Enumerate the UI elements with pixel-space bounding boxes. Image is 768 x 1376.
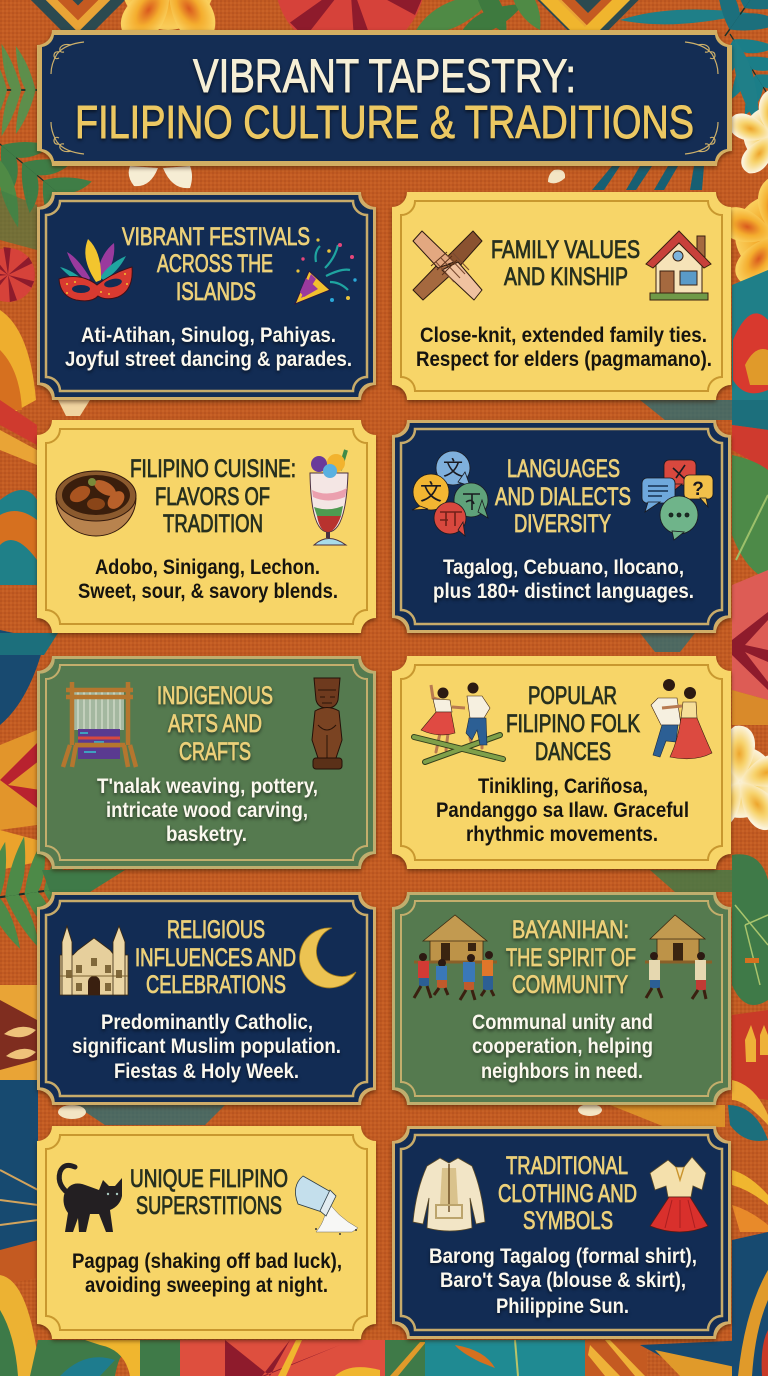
background: right lower tribal <box>732 1232 768 1376</box>
body text: basketry. <box>166 823 247 846</box>
body text <box>416 324 712 371</box>
heading: FILIPINO CUISINE: <box>130 455 296 483</box>
body text: Predominantly Catholic, <box>101 1011 313 1034</box>
heading: LANGUAGES <box>507 455 620 483</box>
icon: halo-halo parfait <box>310 450 348 545</box>
icon: house <box>646 231 711 300</box>
heading: DANCES <box>535 738 611 766</box>
body text <box>433 556 694 603</box>
panel: traditional clothing <box>392 1126 731 1339</box>
background: left blue leaf <box>0 1080 38 1285</box>
heading: SUPERSTITIONS <box>136 1192 282 1220</box>
body text: Joyful street dancing & parades. <box>65 348 352 371</box>
body text: T'nalak weaving, pottery, <box>97 775 318 798</box>
body text: Tinikling, Cariñosa, <box>478 775 648 798</box>
body text: Barong Tagalog (formal shirt), <box>429 1245 697 1268</box>
icon: baro't saya dress <box>650 1157 708 1232</box>
body text: Communal unity and <box>472 1011 653 1034</box>
heading <box>59 223 357 371</box>
heading <box>506 916 636 999</box>
body text: Respect for elders (pagmamano). <box>416 348 712 371</box>
panel: religious influences <box>37 892 376 1105</box>
background: teal fronds under title <box>592 166 704 190</box>
background: white petals under title <box>129 166 565 188</box>
body text: intricate wood carving, <box>106 799 308 822</box>
icon: wooden statue <box>312 678 342 769</box>
icon: adobo bowl <box>56 471 136 536</box>
icon: barong shirt <box>413 1158 485 1231</box>
background: bottom left leaves <box>0 1275 185 1376</box>
heading: BAYANIHAN: <box>512 916 629 944</box>
body text: avoiding sweeping at night. <box>85 1274 328 1297</box>
body text <box>429 1245 697 1318</box>
body text: plus 180+ distinct languages. <box>433 580 694 603</box>
body text: rhythmic movements. <box>466 823 658 846</box>
background: left red flower <box>0 730 40 870</box>
background: right parrot colors <box>732 270 768 420</box>
heading <box>506 682 640 766</box>
heading <box>495 455 631 538</box>
heading <box>130 1165 288 1220</box>
icon: speech bubbles right: ? <box>692 479 704 500</box>
body text: Tagalog, Cebuano, Ilocano, <box>443 556 684 579</box>
icon: tinikling dancers <box>414 682 503 762</box>
icon: couple dancing <box>651 679 712 759</box>
body text: Philippine Sun. <box>496 1295 629 1318</box>
heading: FAMILY VALUES <box>491 236 640 264</box>
title panel <box>37 30 732 166</box>
heading <box>157 682 273 766</box>
heading: AND DIALECTS <box>495 483 631 511</box>
body text <box>78 556 338 603</box>
body text: Pagpag (shaking off bad luck), <box>72 1250 342 1273</box>
heading <box>498 1152 637 1235</box>
heading: CLOTHING AND <box>498 1180 637 1208</box>
heading: DIVERSITY <box>514 510 611 538</box>
heading: CRAFTS <box>179 738 251 766</box>
heading: RELIGIOUS <box>167 916 265 944</box>
panel: folk dances <box>392 656 731 869</box>
background: top right teal leaves <box>620 0 768 154</box>
icon: speech bubbles left <box>412 451 488 536</box>
body text: significant Muslim population. <box>72 1035 341 1058</box>
heading: INFLUENCES AND <box>135 944 296 972</box>
heading: TRADITION <box>163 510 263 538</box>
body text: Sweet, sour, & savory blends. <box>78 580 338 603</box>
background: left green leaf <box>0 828 99 956</box>
heading: ISLANDS <box>176 278 256 306</box>
body text: Adobo, Sinigang, Lechon. <box>95 556 320 579</box>
icon: hut carried by people <box>414 915 497 1000</box>
heading: AND KINSHIP <box>504 263 628 291</box>
body text <box>65 324 352 371</box>
icon: joined hands <box>413 231 482 300</box>
background: left stripes and teal <box>0 400 37 585</box>
background: right plumeria <box>715 90 768 292</box>
panel: indigenous arts <box>37 656 376 869</box>
heading: FLAVORS OF <box>155 483 270 511</box>
heading <box>135 916 296 999</box>
icon: speech bubbles left: 文 <box>420 475 442 507</box>
panel: vibrant festivals <box>37 192 376 400</box>
panel: superstitions <box>37 1126 376 1339</box>
icon: party popper <box>295 238 357 304</box>
heading <box>130 455 296 538</box>
heading: FILIPINO FOLK <box>506 710 640 738</box>
body text: cooperation, helping <box>472 1035 653 1058</box>
panel: bayanihan <box>392 892 731 1105</box>
heading: UNIQUE FILIPINO <box>130 1165 288 1193</box>
body text: Ati-Atihan, Sinulog, Pahiyas. <box>81 324 336 347</box>
corner ornaments <box>51 42 718 154</box>
background: top tribal diamonds <box>0 0 669 51</box>
background: gap accents row gaps <box>0 400 732 1127</box>
heading: VIBRANT FESTIVALS <box>122 223 310 251</box>
body text <box>436 775 689 846</box>
body text <box>72 1250 342 1297</box>
background: left mid red flower and yellow leaves <box>0 190 37 420</box>
panel: filipino cuisine <box>37 420 376 633</box>
heading: THE SPIRIT OF <box>506 944 636 972</box>
heading: POPULAR <box>528 682 617 710</box>
background: top hibiscus <box>275 0 425 55</box>
background: left blue leaf band <box>0 630 45 725</box>
body text: Close-knit, extended family ties. <box>420 324 707 347</box>
background: bottom teal and tribal <box>385 1340 750 1376</box>
background: right green leaf <box>732 400 768 580</box>
icon: weaving loom <box>63 682 136 767</box>
panel: family values <box>392 192 731 400</box>
body text: Fiestas & Holy Week. <box>114 1060 299 1083</box>
title text: VIBRANT TAPESTRY: <box>193 49 576 102</box>
background: top yellow flower <box>96 0 239 51</box>
icon: spilled salt <box>295 1176 358 1235</box>
background: left green fronds <box>0 44 137 267</box>
heading: SYMBOLS <box>523 1207 613 1235</box>
icon: hut carried by two people <box>645 915 712 999</box>
background: bottom red hibiscus <box>180 1340 385 1376</box>
heading: COMMUNITY <box>512 971 628 999</box>
heading: ARTS AND <box>168 710 262 738</box>
body text: neighbors in need. <box>481 1060 643 1083</box>
heading: ACROSS THE <box>157 250 273 278</box>
body text <box>72 1011 341 1083</box>
heading: INDIGENOUS <box>157 682 273 710</box>
body text: Baro't Saya (blouse & skirt), <box>440 1269 686 1292</box>
body text: Pandanggo sa Ilaw. Graceful <box>436 799 689 822</box>
background: right white flower <box>681 726 768 837</box>
icon: crescent moon <box>300 928 356 988</box>
icon: speech bubbles left: 文 <box>443 452 463 481</box>
heading <box>491 236 640 291</box>
heading: CELEBRATIONS <box>146 971 286 999</box>
title text <box>75 49 694 148</box>
heading: TRADITIONAL <box>506 1152 628 1180</box>
background: right pink and maroon flower <box>732 570 768 725</box>
panel: languages and dialects <box>392 420 731 633</box>
body text <box>97 775 318 846</box>
icon: church <box>60 926 128 995</box>
icon: black cat <box>59 1165 122 1232</box>
icon: festival mask <box>59 239 132 301</box>
icon: speech bubbles right <box>642 460 713 540</box>
background: left tribal <box>0 985 37 1080</box>
background: right monstera <box>732 854 768 1005</box>
background: right lower orange red <box>728 1010 768 1232</box>
body text <box>472 1011 653 1083</box>
background: top green leaves <box>410 0 549 43</box>
